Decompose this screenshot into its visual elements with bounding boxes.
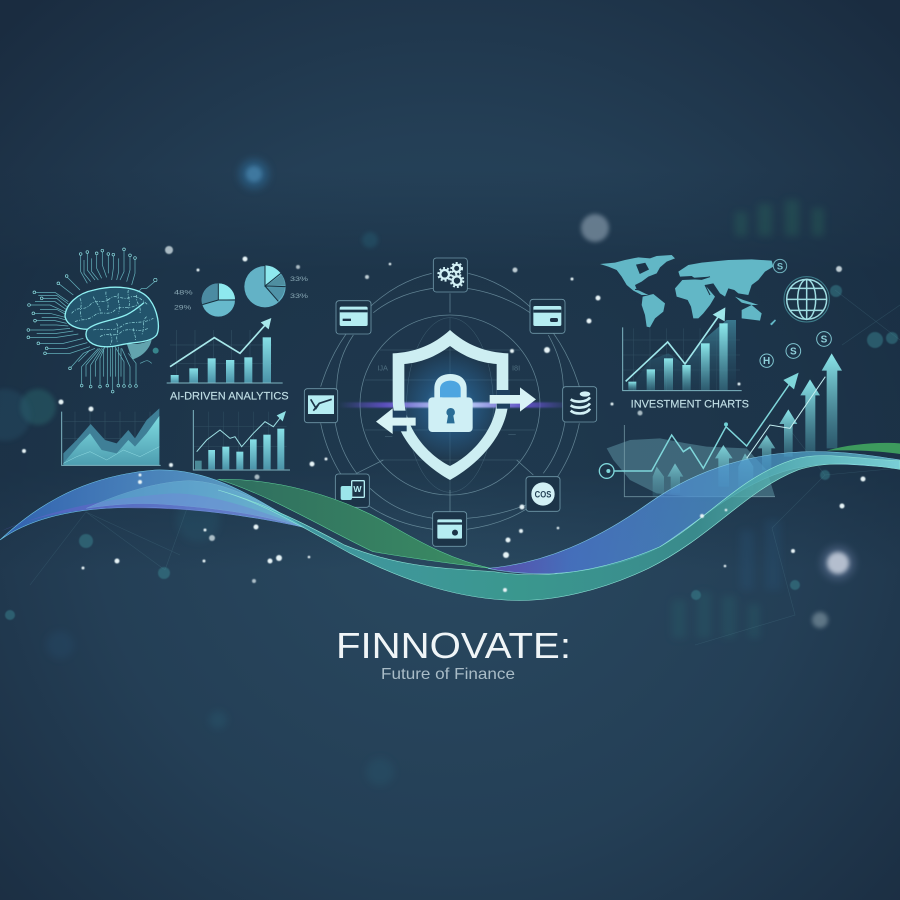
- icon node: coin: [526, 477, 560, 511]
- icon node: documents: [335, 474, 369, 507]
- icon node: chart left: [304, 389, 338, 423]
- investment bar chart: [623, 307, 742, 391]
- central glow and beam: [338, 350, 572, 460]
- dollar coins: H: [763, 356, 770, 367]
- pie chart right: [244, 265, 286, 307]
- world map: [600, 255, 776, 327]
- icon node: database: [563, 387, 597, 422]
- globe grid with faint data marks: —: [508, 430, 516, 439]
- icon: brain with circuit traces: [27, 248, 159, 393]
- icon node: card upper left: [336, 301, 371, 334]
- growth chart with dim map and arrows: [599, 353, 842, 497]
- dollar coins: [760, 332, 831, 367]
- icon: globe: [784, 277, 829, 322]
- background bokeh and network nodes: [0, 159, 900, 786]
- icon: dollar coin by map: S: [777, 261, 783, 271]
- ribbon: teal and green lower: [218, 456, 900, 601]
- ribbon: green crest right: [827, 443, 900, 454]
- panel: investment charts: [599, 259, 842, 497]
- label: investment charts: INVESTMENT CHARTS: [631, 398, 749, 410]
- pie labels: 33%: [290, 293, 309, 300]
- pie chart left: [202, 283, 235, 317]
- flowing wave ribbons: [0, 443, 900, 601]
- globe grid with faint data marks: I8I: [512, 364, 520, 373]
- pie labels: [174, 276, 309, 311]
- icon node: gears: [433, 258, 467, 292]
- dollar coins: S: [821, 335, 828, 346]
- pie labels: 33%: [290, 276, 309, 283]
- ribbon: green crest left: [218, 479, 491, 568]
- icon: shield with exchange arrows: [376, 330, 536, 480]
- title: FINNOVATE:: [336, 625, 571, 666]
- subtitle: Future of Finance: [381, 666, 515, 683]
- bar chart with trend arrow: [167, 318, 283, 383]
- icon node: documents: W: [353, 484, 362, 494]
- pie labels: 29%: [174, 304, 192, 311]
- globe grid with faint data marks: [365, 318, 535, 492]
- panel: AI-driven analytics: [27, 248, 309, 470]
- label: AI-driven analytics: AI-DRIVEN ANALYTICS: [170, 391, 289, 403]
- icon node: coin: COS: [535, 490, 551, 500]
- area chart: [62, 408, 161, 465]
- icon node: card bottom: [433, 512, 467, 546]
- ribbon: blue right: [488, 452, 900, 574]
- pie labels: 48%: [174, 290, 193, 297]
- ribbon: purple underside: [0, 493, 304, 532]
- globe grid with faint data marks: —: [385, 431, 393, 440]
- globe grid with faint data marks: IJA: [377, 364, 388, 373]
- ribbon: light crossing band: [86, 481, 310, 530]
- particle stars: [22, 246, 866, 592]
- icon: dollar coin by map: [773, 259, 787, 273]
- dollar coins: S: [790, 347, 797, 358]
- combo bar and line chart: [193, 410, 290, 470]
- icon node: card upper right: [530, 299, 565, 333]
- icon: padlock: [428, 374, 473, 432]
- orbit rings: [321, 273, 579, 529]
- panel: central security hub: [304, 258, 597, 546]
- ribbon: blue left: [0, 470, 304, 540]
